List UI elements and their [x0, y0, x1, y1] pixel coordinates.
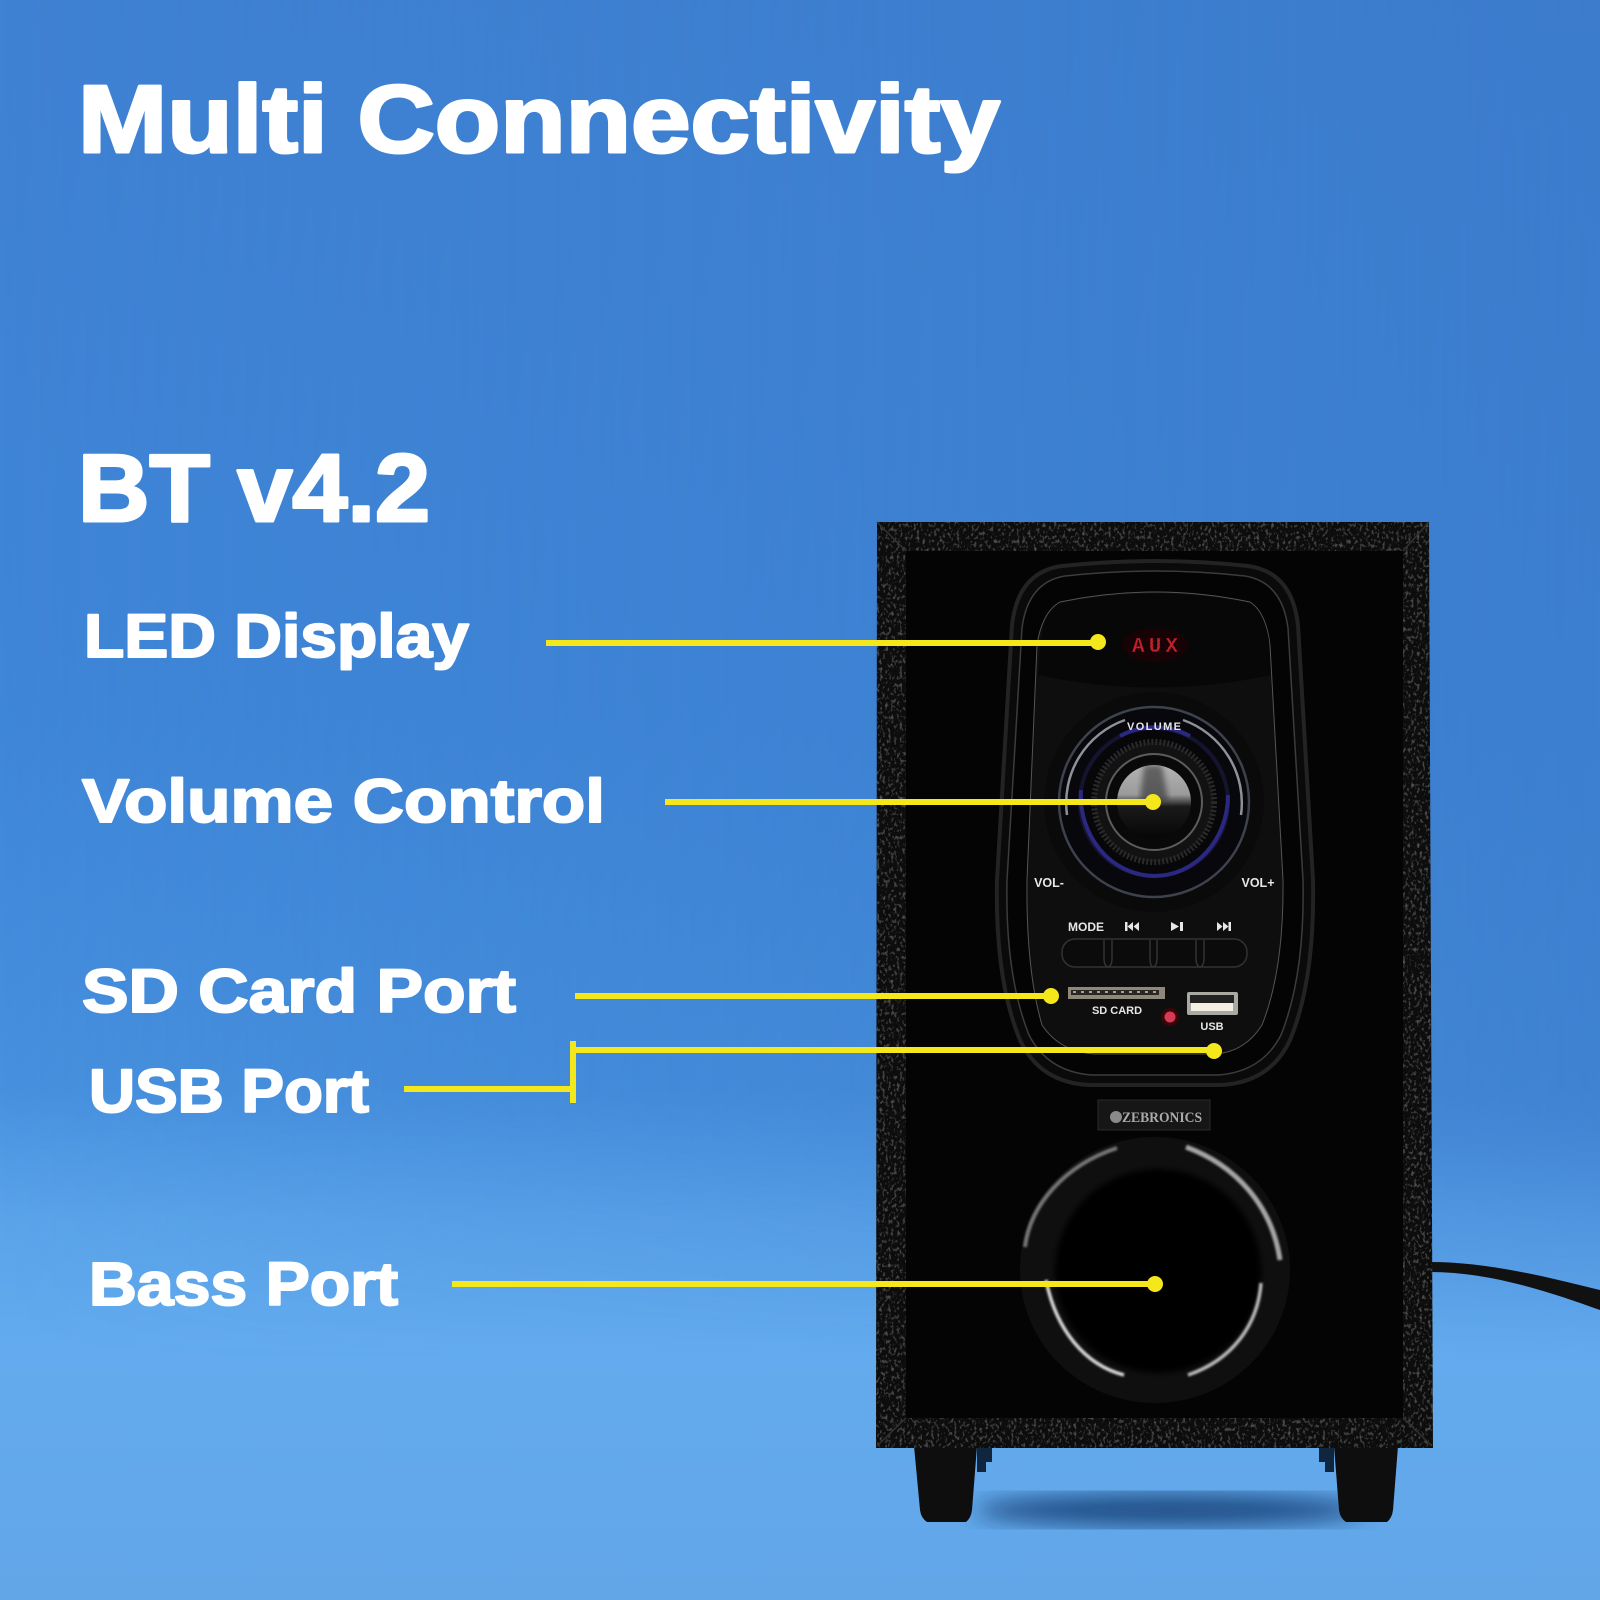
speaker shadow: [975, 1494, 1365, 1526]
callout: USB Port: [89, 1041, 1222, 1125]
label: Volume Control: [82, 767, 605, 835]
USB port: [1187, 992, 1238, 1015]
cabinet front: [906, 551, 1403, 1418]
power cable: [1430, 1262, 1600, 1310]
SD card slot: [1068, 987, 1165, 999]
label: Bass Port: [89, 1250, 398, 1318]
rear foot marks: [977, 1448, 1334, 1472]
title: Multi Connectivity: [78, 66, 1000, 173]
volume label: VOLUME: [1127, 721, 1181, 733]
speaker: [876, 522, 1433, 1522]
pointer line: [665, 794, 1161, 810]
label: USB Port: [89, 1057, 369, 1125]
play pause icon: [1171, 922, 1183, 931]
callout: LED Display: [84, 602, 1106, 670]
volume minus label: VOL-: [1034, 876, 1064, 890]
callout: Bass Port: [89, 1250, 1163, 1318]
SD card label: SD CARD: [1092, 1005, 1142, 1017]
pointer line: [575, 988, 1059, 1004]
display band: [1038, 594, 1271, 688]
next icon: [1217, 922, 1231, 931]
mode label: MODE: [1068, 920, 1104, 934]
volume plus label: VOL+: [1242, 876, 1274, 890]
status LED: [1161, 1008, 1179, 1026]
control panel: [997, 561, 1313, 1085]
pointer line: [452, 1276, 1163, 1292]
bass port: [1020, 1137, 1290, 1403]
ball reflection divider: [1140, 765, 1168, 800]
subheading: bluetooth version: BT v4.2: [78, 435, 430, 542]
LED display: AUX: [1132, 636, 1178, 659]
label: SD Card Port: [82, 957, 516, 1025]
pointer bracket: [404, 1041, 1222, 1103]
previous icon: [1125, 922, 1139, 931]
brand badge: ZEBRONICS: [1122, 1110, 1202, 1126]
control buttons: [1062, 939, 1247, 967]
callout: Volume Control: [82, 767, 1161, 835]
label: LED Display: [84, 602, 469, 670]
right foot: [1334, 1446, 1398, 1522]
LED display: [1122, 628, 1188, 662]
callout: SD Card Port: [82, 957, 1059, 1025]
cabinet frame: [876, 522, 1433, 1448]
pointer line: [546, 634, 1106, 650]
volume knob: [1044, 692, 1264, 912]
USB label: USB: [1200, 1021, 1224, 1033]
brand badge: [1098, 1100, 1210, 1130]
left foot: [914, 1446, 977, 1522]
